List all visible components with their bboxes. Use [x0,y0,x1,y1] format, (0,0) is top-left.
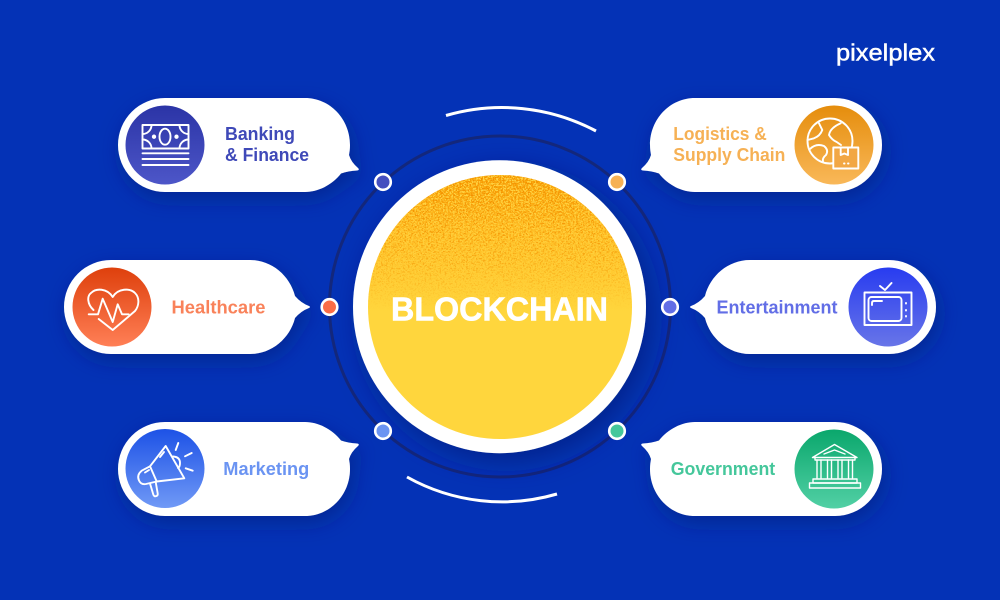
speech bubble [641,422,882,516]
center title: BLOCKCHAIN [391,292,608,328]
speech bubble [64,260,310,354]
label: Marketing [223,458,309,479]
grain texture [368,175,632,298]
logo: pixelplex: pixelplex [836,40,936,66]
decorative arc: top [446,108,596,131]
node: healthcare [322,299,337,315]
icon: heart with pulse [72,268,152,346]
panel: entertainment [690,260,936,354]
decorative arc: bottom [407,477,557,502]
panel: marketing [118,422,359,516]
label: & Finance [225,144,309,165]
yellow disc [368,175,632,439]
label: Logistics & [673,123,767,144]
icon: megaphone [126,429,204,508]
icon: television [848,268,928,346]
icon: globe and parcel [794,106,874,184]
node: marketing [375,423,391,439]
central circle: blockchain [353,160,646,453]
speech bubble [118,422,359,516]
panel: government [641,422,882,516]
speech bubble [641,98,882,192]
label: Healthcare [172,296,266,318]
speech bubble [118,98,359,192]
orbit ring [330,136,670,477]
label: Government [671,458,775,479]
node: entertainment [662,299,678,315]
panel: logistics and supply chain [641,98,882,192]
node: logistics [609,174,625,190]
infographic canvas [61,43,945,530]
white disc [353,160,646,453]
icon: banknote [126,106,204,184]
label: Supply Chain [673,144,785,165]
panel: banking and finance [118,98,359,192]
label: Entertainment [716,296,838,318]
label: Banking [225,123,295,144]
node: government [609,423,625,439]
speech bubble [690,260,936,354]
icon: government building [794,430,874,508]
panel: healthcare [64,260,310,354]
node: banking [375,174,391,190]
